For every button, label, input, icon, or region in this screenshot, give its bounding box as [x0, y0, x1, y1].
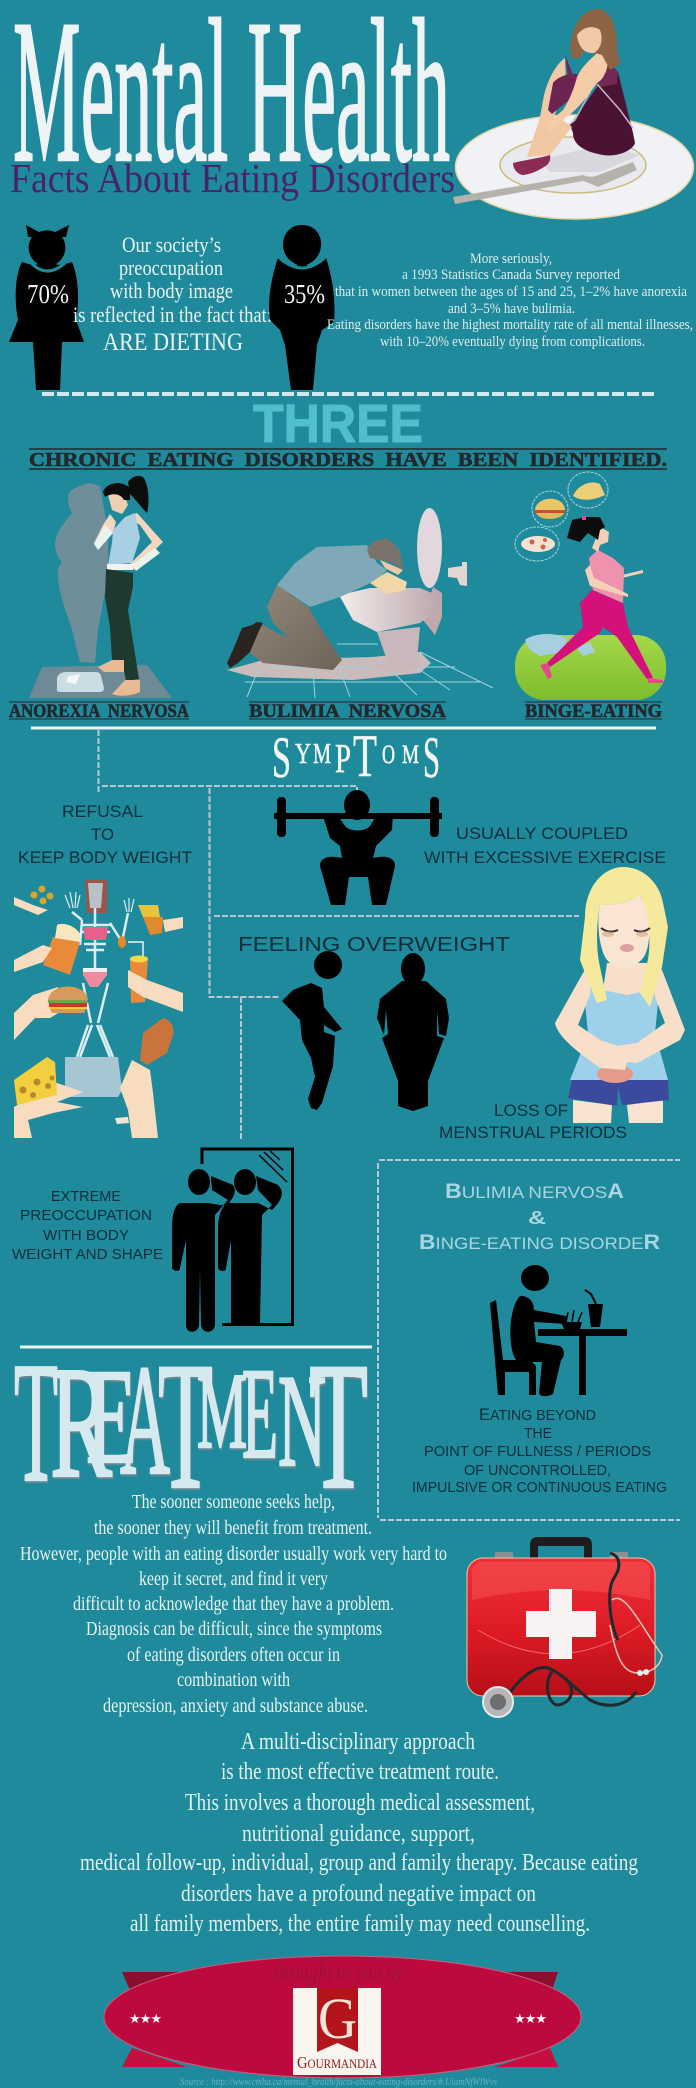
text: treatment paragraph one: keep it secret, and find it very — [139, 1568, 328, 1590]
text: treatment paragraph one: The sooner someone seeks help, — [132, 1491, 335, 1513]
text: refusal to keep body weight — [18, 802, 192, 867]
text: refusal to keep body weight: REFUSAL — [62, 802, 143, 821]
text: brought to you by: Brought to you by: — [273, 1960, 410, 1986]
text: society preoccupation — [73, 232, 272, 356]
text: excessive exercise: USUALLY COUPLED — [456, 824, 628, 843]
text: loss of menstrual periods — [439, 1101, 627, 1142]
footer banner — [104, 1956, 581, 2078]
label: binge-eating: BINGE-EATING — [525, 701, 662, 722]
text: treatment paragraph one: depression, anxiety and substance abuse. — [103, 1695, 368, 1717]
stars right: ★★★ — [514, 2011, 547, 2026]
text: society preoccupation: with body image — [110, 278, 233, 303]
text: treatment paragraph one: of eating disorders often occur in — [127, 1644, 340, 1666]
icon: woman silhouette 70% — [9, 225, 84, 390]
subtitle: Facts About Eating Disorders — [10, 155, 455, 201]
logo: gourmandia: GOURMANDIA — [297, 2053, 378, 2072]
heading: bulimia nervosa and binge-eating disorder — [419, 1180, 660, 1254]
heading: bulimia nervosa and binge-eating disorder: BULIMIA NERVOS A — [445, 1180, 624, 1203]
text: treatment paragraph one: Diagnosis can be difficult, since the symptoms — [86, 1618, 382, 1640]
heading: treatment: N — [278, 1347, 326, 1494]
heading: treatment: E — [86, 1342, 137, 1492]
text: refusal to keep body weight: TO — [91, 825, 114, 844]
text: eating beyond the point of fullness: OF UNCONTROLLED, — [464, 1463, 611, 1479]
text: society preoccupation: Our society’s — [122, 232, 221, 257]
text: source: Source : http://www.cmha.ca/mental_health/facts-about-eating-disorders/#.UiamNfWlWvs — [180, 2076, 497, 2088]
text: treatment paragraph two — [80, 1729, 638, 1937]
text: eating beyond the point of fullness: EATING BEYOND — [479, 1405, 596, 1424]
text: feeling overweight: FEELING OVERWEIGHT — [238, 934, 510, 956]
text: treatment paragraph two: disorders have a profound negative impact on — [181, 1881, 536, 1907]
text: refusal to keep body weight: KEEP BODY WEIGHT — [18, 848, 192, 867]
text: extreme preoccupation: PREOCCUPATION — [20, 1208, 152, 1224]
illustration: woman sitting on plate with fork — [453, 9, 694, 219]
text: society preoccupation: ARE DIETING — [103, 329, 243, 356]
heading: symptoms: P — [335, 735, 351, 781]
heading: symptoms: S — [272, 725, 291, 790]
heading: three: THREE — [253, 394, 423, 454]
illustration: first aid kit with stethoscope — [467, 1537, 662, 1717]
icon: figure silhouette 35%: 35% — [284, 279, 325, 309]
text: loss of menstrual periods: MENSTRUAL PERIODS — [439, 1123, 627, 1142]
heading: treatment: M — [197, 1352, 247, 1471]
text: statistics paragraph: with 10–20% eventually dying from complications. — [380, 334, 645, 350]
text: society preoccupation: preoccupation — [119, 255, 223, 280]
text: treatment paragraph one: difficult to acknowledge that they have a problem. — [73, 1593, 394, 1615]
text: treatment paragraph two: all family members, the entire family may need counselling. — [130, 1911, 590, 1937]
heading: symptoms: M — [313, 738, 331, 770]
heading: treatment: E — [242, 1342, 278, 1486]
illustration: anorexia woman with scale — [29, 476, 172, 698]
illustration: food around skeleton — [14, 880, 183, 1138]
text: society preoccupation: is reflected in the fact that: — [73, 302, 272, 327]
label: bulimia nervosa: BULIMIA NERVOSA — [249, 701, 446, 722]
text: treatment paragraph one: combination with — [177, 1669, 290, 1691]
text: treatment paragraph two: is the most effective treatment route. — [221, 1759, 499, 1785]
text: treatment paragraph one — [20, 1491, 447, 1717]
icon: thin and overweight figures — [282, 951, 449, 1111]
heading: symptoms: T — [353, 723, 377, 789]
text: extreme preoccupation: WEIGHT AND SHAPE — [12, 1247, 163, 1263]
logo: gourmandia — [293, 1986, 381, 2075]
text: statistics paragraph: More seriously, — [470, 251, 552, 267]
illustration: man vomiting in toilet — [227, 508, 493, 698]
heading: bulimia nervosa and binge-eating disorder: BINGE-EATING DISORDE R — [419, 1231, 660, 1254]
text: eating beyond the point of fullness: THE — [524, 1426, 552, 1442]
label: anorexia nervosa: ANOREXIA NERVOSA — [9, 701, 189, 722]
heading: chronic eating disorders: CHRONIC EATING DISORDERS HAVE BEEN IDENTIFIED. — [29, 449, 667, 471]
text: treatment paragraph two: This involves a thorough medical assessment, — [185, 1790, 535, 1816]
heading: treatment: A — [120, 1333, 170, 1508]
heading: symptoms: M — [402, 740, 419, 769]
heading: symptoms: S — [423, 725, 440, 790]
text: eating beyond the point of fullness: POINT OF FULLNESS / PERIODS — [424, 1444, 651, 1460]
icon: figures before mirror — [172, 1149, 292, 1332]
heading: bulimia nervosa and binge-eating disorder: & — [528, 1208, 546, 1228]
heading: treatment: T — [309, 1326, 368, 1527]
heading: treatment: T — [158, 1326, 213, 1527]
heading: treatment: R — [50, 1333, 112, 1511]
text: treatment paragraph one: However, people with an eating disorder usually work very hard to — [20, 1543, 447, 1565]
heading: treatment — [14, 1326, 368, 1527]
text: extreme preoccupation: EXTREME — [51, 1189, 121, 1205]
text: excessive exercise: WITH EXCESSIVE EXERCISE — [424, 848, 666, 867]
text: statistics paragraph — [327, 251, 693, 350]
heading: symptoms: O — [382, 740, 395, 769]
heading: symptoms — [272, 723, 440, 790]
text: extreme preoccupation: WITH BODY — [43, 1228, 129, 1244]
illustration: binge-eating woman running — [515, 472, 666, 700]
text: treatment paragraph one: the sooner they will benefit from treatment. — [94, 1517, 372, 1539]
text: excessive exercise — [424, 824, 666, 867]
icon: figure silhouette 35% — [269, 225, 335, 390]
text: loss of menstrual periods: LOSS OF — [494, 1101, 568, 1120]
icon: woman silhouette 70%: 70% — [27, 279, 69, 309]
logo: gourmandia: G — [318, 1986, 357, 2051]
text: treatment paragraph two: nutritional guidance, support, — [242, 1821, 475, 1847]
heading: symptoms: Y — [295, 738, 311, 770]
stars left: ★★★ — [129, 2011, 162, 2026]
icon: weightlifter — [274, 790, 442, 905]
text: statistics paragraph: and 3–5% have bulimia. — [448, 301, 575, 317]
text: extreme preoccupation — [12, 1189, 163, 1263]
text: treatment paragraph two: A multi-disciplinary approach — [241, 1729, 475, 1755]
illustration: blonde woman holding stomach — [555, 867, 685, 1123]
heading: treatment: T — [14, 1328, 58, 1518]
icon: person eating at table — [490, 1265, 627, 1396]
text: statistics paragraph: a 1993 Statistics Canada Survey reported — [402, 267, 620, 283]
text: eating beyond the point of fullness — [412, 1405, 667, 1496]
text: eating beyond the point of fullness: IMPULSIVE OR CONTINUOUS EATING — [412, 1480, 667, 1496]
